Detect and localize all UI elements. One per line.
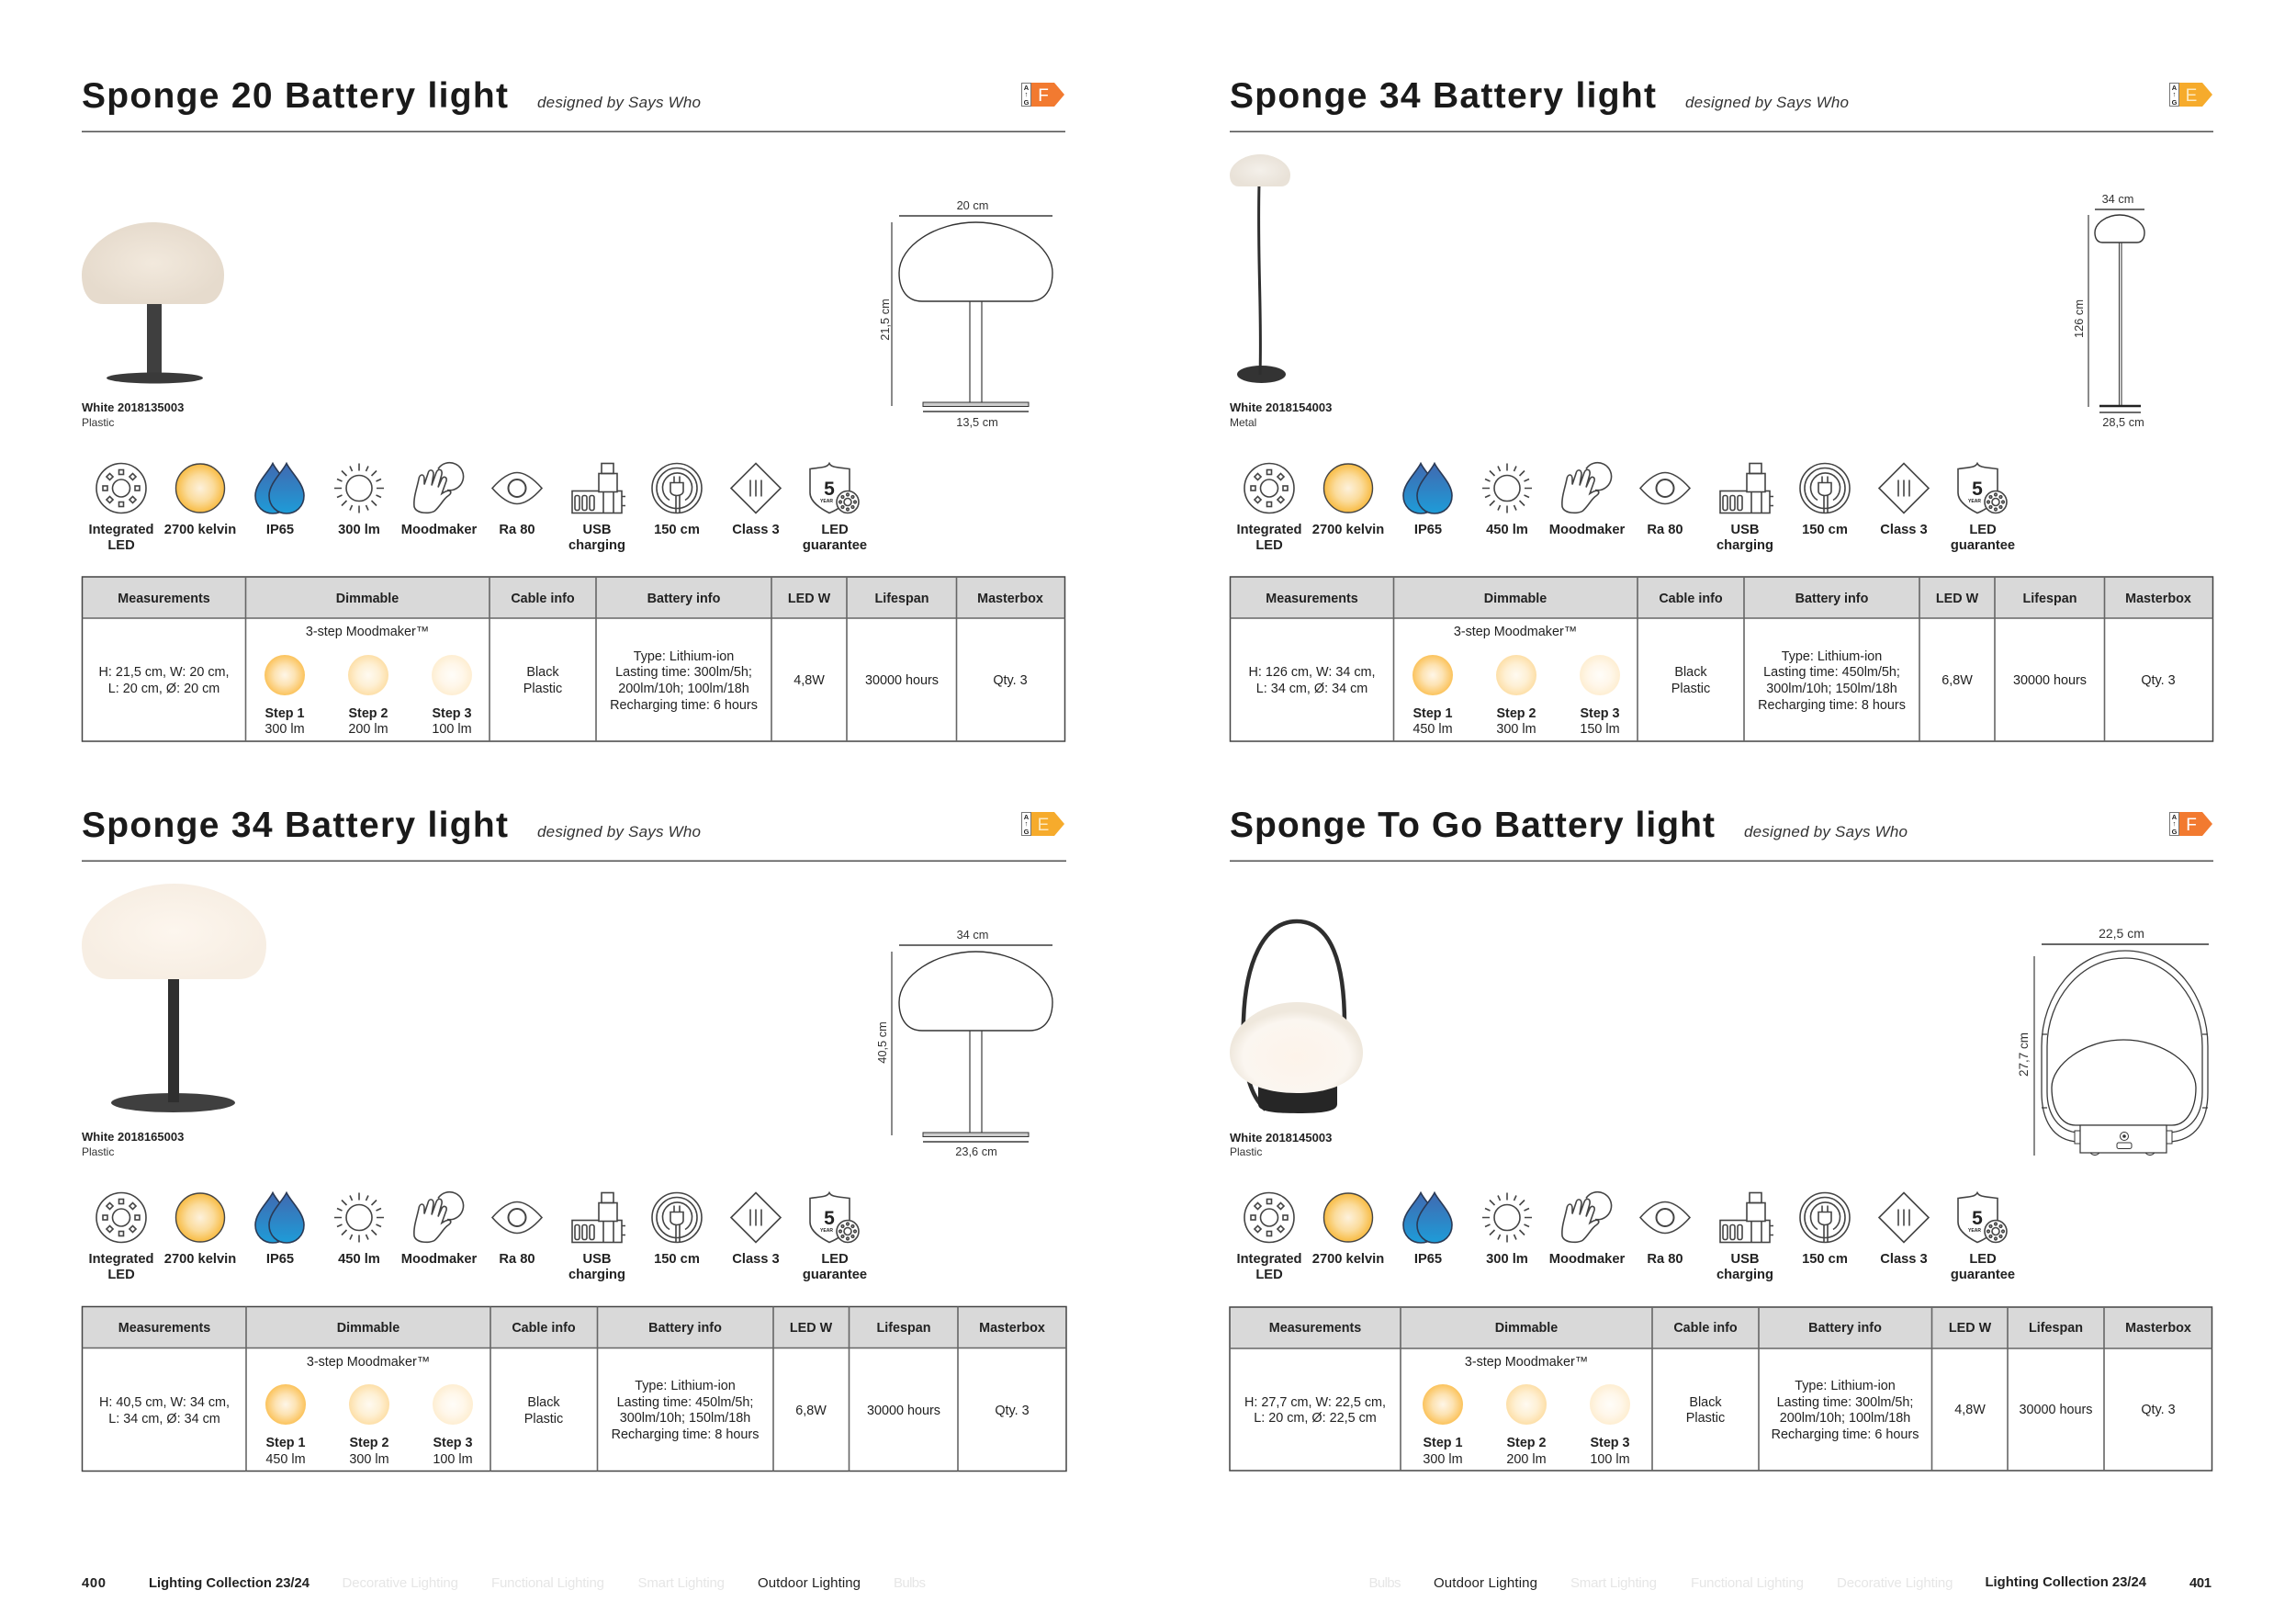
dimension drawing: 22,5 cm bbox=[2099, 926, 2144, 941]
spec table: Battery info bbox=[648, 1321, 722, 1336]
spec table: 30000 hours bbox=[2019, 1403, 2093, 1417]
spec table bbox=[1230, 1307, 2212, 1471]
dimension drawing: 126 cm bbox=[2072, 299, 2086, 338]
feature: USB charging: charging bbox=[1716, 1268, 1773, 1282]
spec table: 200lm/10h; 100lm/18h bbox=[1780, 1411, 1910, 1426]
spec table: Lifespan bbox=[2023, 592, 2077, 606]
spec table: Masterbox bbox=[977, 592, 1043, 606]
spec table: 30000 hours bbox=[865, 673, 939, 688]
spec table: Type: Lithium-ion bbox=[635, 1379, 736, 1393]
energy label bbox=[1021, 812, 1064, 836]
feature: USB charging: charging bbox=[568, 538, 625, 553]
spec table: Qty. 3 bbox=[2141, 673, 2176, 688]
feature: Moodmaker: Moodmaker bbox=[401, 1252, 477, 1267]
feature: USB charging: USB bbox=[582, 1252, 612, 1267]
feature: 150 cm: 150 cm bbox=[1802, 523, 1848, 537]
feature: Ra 80: Ra 80 bbox=[499, 1252, 535, 1267]
dimension drawing: 40,5 cm bbox=[875, 1021, 889, 1064]
feature: IP65: IP65 bbox=[266, 523, 294, 537]
panel: Sponge 34 Battery light table bbox=[82, 806, 1066, 1472]
energy label: G bbox=[1024, 828, 1030, 836]
energy label: A bbox=[2172, 813, 2178, 821]
feature: LED guarantee: 5 bbox=[1972, 479, 1983, 500]
feature: Class 3: Class 3 bbox=[732, 1252, 780, 1267]
product photo bbox=[1230, 154, 1290, 383]
feature: 450 lm: 450 lm bbox=[338, 1252, 380, 1267]
feature: LED guarantee: LED bbox=[1969, 1252, 1997, 1267]
feature: 2700 kelvin: 2700 kelvin bbox=[164, 1252, 236, 1267]
spec table: L: 34 cm, Ø: 34 cm bbox=[1256, 682, 1367, 696]
energy label bbox=[1021, 83, 1064, 107]
feature: LED guarantee bbox=[1951, 1192, 2015, 1282]
feature: 150 cm: 150 cm bbox=[1802, 1252, 1848, 1267]
designer credit: designed by Says Who bbox=[537, 823, 701, 840]
feature: LED guarantee: guarantee bbox=[803, 538, 867, 553]
feature: Integrated LED: Integrated bbox=[1236, 1252, 1302, 1267]
spec table: 100 lm bbox=[1590, 1452, 1630, 1467]
spec table: L: 34 cm, Ø: 34 cm bbox=[108, 1412, 220, 1427]
spec table: Lasting time: 450lm/5h; bbox=[617, 1395, 753, 1410]
footer: left page: Lighting Collection 23/24 bbox=[149, 1576, 310, 1591]
feature: Class 3 bbox=[1879, 463, 1929, 537]
product code: White 2018145003 bbox=[1230, 1131, 1332, 1145]
feature: IP65 bbox=[255, 1192, 304, 1267]
spec table: 100 lm bbox=[433, 1452, 473, 1467]
spec table: Cable info bbox=[1659, 592, 1723, 606]
spec table: H: 27,7 cm, W: 22,5 cm, bbox=[1244, 1395, 1386, 1410]
spec table: Lasting time: 300lm/5h; bbox=[615, 665, 752, 680]
spec table: 200 lm bbox=[1506, 1452, 1547, 1467]
feature: Ra 80 bbox=[1640, 1201, 1690, 1267]
feature: Integrated LED bbox=[1236, 1192, 1302, 1282]
feature: Ra 80 bbox=[492, 472, 542, 537]
spec table: Dimmable bbox=[1495, 1321, 1558, 1336]
spec table bbox=[1231, 577, 2213, 741]
feature: USB charging bbox=[568, 463, 625, 553]
feature: 300 lm: 300 lm bbox=[338, 523, 380, 537]
designer credit: designed by Says Who bbox=[1685, 94, 1849, 111]
spec table: 30000 hours bbox=[2013, 673, 2087, 688]
product photo bbox=[82, 222, 224, 384]
spec table: L: 20 cm, Ø: 20 cm bbox=[108, 682, 219, 696]
feature: 2700 kelvin: 2700 kelvin bbox=[164, 523, 236, 537]
footer: right page: Outdoor Lighting bbox=[1434, 1575, 1537, 1591]
footer: right page: Functional Lighting bbox=[1691, 1575, 1804, 1591]
feature: 150 cm bbox=[1800, 1192, 1850, 1267]
spec table: Lifespan bbox=[877, 1321, 930, 1336]
feature: Integrated LED bbox=[88, 1192, 154, 1282]
feature: LED guarantee: guarantee bbox=[803, 1268, 867, 1282]
designer credit: designed by Says Who bbox=[1744, 823, 1908, 840]
dimension drawing: 21,5 cm bbox=[878, 299, 892, 341]
product code: White 2018135003 bbox=[82, 400, 184, 414]
feature: Moodmaker: Moodmaker bbox=[1549, 1252, 1625, 1267]
energy label: G bbox=[2172, 828, 2178, 836]
energy label: G bbox=[2172, 98, 2178, 107]
spec table: LED W bbox=[790, 1321, 833, 1336]
footer: left page bbox=[82, 1575, 926, 1591]
feature: LED guarantee: YEAR bbox=[820, 1228, 833, 1234]
feature: IP65: IP65 bbox=[1414, 523, 1442, 537]
spec table: Step 1 bbox=[1423, 1436, 1463, 1450]
feature: 450 lm bbox=[1482, 463, 1532, 537]
spec table: Cable info bbox=[511, 592, 575, 606]
feature: 2700 kelvin bbox=[1312, 1193, 1384, 1267]
footer: left page: 400 bbox=[82, 1576, 106, 1591]
dimension drawing: 27,7 cm bbox=[2017, 1032, 2031, 1077]
feature: Moodmaker bbox=[401, 463, 477, 537]
energy label: F bbox=[1038, 86, 1049, 106]
material: Metal bbox=[1230, 416, 1256, 429]
feature: LED guarantee: guarantee bbox=[1951, 538, 2015, 553]
feature: 150 cm bbox=[652, 1192, 702, 1267]
spec table: Black bbox=[1689, 1395, 1722, 1410]
spec table: Step 1 bbox=[264, 706, 305, 721]
spec table: Black bbox=[527, 1395, 560, 1410]
feature: 150 cm bbox=[652, 463, 702, 537]
feature: Integrated LED: LED bbox=[1255, 538, 1283, 553]
product photo bbox=[1230, 921, 1363, 1113]
spec table: Cable info bbox=[512, 1321, 576, 1336]
energy label: A bbox=[1024, 84, 1030, 92]
feature: Integrated LED: Integrated bbox=[88, 1252, 154, 1267]
dimension drawing bbox=[875, 928, 1052, 1158]
spec table: Measurements bbox=[118, 592, 210, 606]
dimension drawing: 34 cm bbox=[957, 928, 988, 942]
spec table: 300 lm bbox=[1496, 722, 1536, 737]
spec table: Step 1 bbox=[265, 1436, 306, 1450]
feature: Class 3 bbox=[731, 463, 781, 537]
feature: USB charging bbox=[568, 1192, 625, 1282]
panel: Sponge 34 Battery light floor bbox=[1230, 76, 2213, 741]
spec table: Step 2 bbox=[1506, 1436, 1547, 1450]
spec table: 300 lm bbox=[349, 1452, 389, 1467]
spec table: Type: Lithium-ion bbox=[634, 649, 734, 664]
feature: Class 3: Class 3 bbox=[1880, 1252, 1928, 1267]
spec table: Step 3 bbox=[433, 1436, 473, 1450]
spec table: Step 1 bbox=[1412, 706, 1453, 721]
panel: Sponge 20 Battery light bbox=[82, 76, 1065, 741]
spec table: Battery info bbox=[647, 592, 721, 606]
energy label: ↑ bbox=[1025, 90, 1028, 98]
feature: USB charging: charging bbox=[568, 1268, 625, 1282]
feature: Integrated LED: Integrated bbox=[1236, 523, 1302, 537]
feature: LED guarantee: guarantee bbox=[1951, 1268, 2015, 1282]
spec table: Masterbox bbox=[2125, 1321, 2191, 1336]
title: Sponge To Go Battery light bbox=[1230, 806, 1715, 845]
spec table: LED W bbox=[1936, 592, 1979, 606]
spec table: 100 lm bbox=[432, 722, 472, 737]
feature: Moodmaker: Moodmaker bbox=[1549, 523, 1625, 537]
product photo bbox=[82, 884, 266, 1112]
energy label: A bbox=[2172, 84, 2178, 92]
product code: White 2018165003 bbox=[82, 1130, 184, 1144]
spec table: Step 3 bbox=[1590, 1436, 1630, 1450]
feature: LED guarantee: LED bbox=[821, 1252, 849, 1267]
feature: Integrated LED: Integrated bbox=[88, 523, 154, 537]
spec table: Qty. 3 bbox=[2141, 1403, 2176, 1417]
feature: Integrated LED: LED bbox=[107, 538, 135, 553]
spec table: H: 21,5 cm, W: 20 cm, bbox=[98, 665, 230, 680]
feature: Integrated LED: LED bbox=[1255, 1268, 1283, 1282]
energy label: F bbox=[2186, 816, 2197, 835]
feature: Ra 80: Ra 80 bbox=[1647, 1252, 1683, 1267]
spec table: 6,8W bbox=[795, 1404, 827, 1418]
feature: LED guarantee: YEAR bbox=[1968, 1228, 1981, 1234]
feature: Class 3 bbox=[1879, 1192, 1929, 1267]
spec table: Battery info bbox=[1808, 1321, 1882, 1336]
spec table: 6,8W bbox=[1941, 673, 1973, 688]
feature: IP65 bbox=[255, 463, 304, 537]
spec table: 200lm/10h; 100lm/18h bbox=[618, 682, 749, 696]
spec table: Qty. 3 bbox=[995, 1404, 1030, 1418]
footer: right page: Lighting Collection 23/24 bbox=[1986, 1575, 2147, 1590]
spec table: L: 20 cm, Ø: 22,5 cm bbox=[1254, 1411, 1377, 1426]
spec table: 200 lm bbox=[348, 722, 388, 737]
spec table: Recharging time: 6 hours bbox=[610, 698, 758, 713]
feature: Ra 80 bbox=[1640, 472, 1690, 537]
spec table: Dimmable bbox=[337, 1321, 400, 1336]
spec table: 450 lm bbox=[265, 1452, 306, 1467]
dimension drawing: 13,5 cm bbox=[956, 415, 998, 429]
feature: USB charging: USB bbox=[1730, 523, 1760, 537]
spec table: Masterbox bbox=[979, 1321, 1045, 1336]
spec table: Dimmable bbox=[1484, 592, 1547, 606]
feature: LED guarantee bbox=[803, 1192, 867, 1282]
feature: Class 3: Class 3 bbox=[732, 523, 780, 537]
dimension drawing bbox=[2017, 926, 2209, 1156]
spec table: 3-step Moodmaker™ bbox=[1465, 1355, 1588, 1370]
material: Plastic bbox=[1230, 1145, 1262, 1158]
feature: LED guarantee: 5 bbox=[824, 479, 835, 500]
title: Sponge 34 Battery light bbox=[82, 806, 508, 845]
feature: LED guarantee: 5 bbox=[824, 1208, 835, 1229]
feature: Moodmaker bbox=[1549, 1192, 1625, 1267]
feature: Moodmaker bbox=[401, 1192, 477, 1267]
spec table: Cable info bbox=[1673, 1321, 1738, 1336]
energy label: E bbox=[1038, 816, 1049, 835]
dimension drawing: 20 cm bbox=[957, 198, 988, 212]
spec table: 4,8W bbox=[1954, 1403, 1986, 1417]
feature: Ra 80 bbox=[492, 1201, 542, 1267]
footer: right page bbox=[1368, 1575, 2212, 1591]
spec table: 3-step Moodmaker™ bbox=[1454, 625, 1577, 639]
spec table: Black bbox=[526, 665, 559, 680]
spec table: Qty. 3 bbox=[993, 673, 1028, 688]
spec table: Step 3 bbox=[432, 706, 472, 721]
feature: 150 cm: 150 cm bbox=[654, 1252, 700, 1267]
feature: 2700 kelvin bbox=[164, 1193, 236, 1267]
feature: 300 lm bbox=[1482, 1192, 1532, 1267]
spec table: LED W bbox=[788, 592, 831, 606]
energy label: A bbox=[1024, 813, 1030, 821]
energy label: ↑ bbox=[1025, 819, 1028, 828]
spec table: Plastic bbox=[523, 682, 562, 696]
spec table: 150 lm bbox=[1580, 722, 1620, 737]
footer: left page: Functional Lighting bbox=[491, 1575, 604, 1591]
spec table: Step 2 bbox=[348, 706, 388, 721]
spec table: Plastic bbox=[524, 1412, 563, 1427]
feature: LED guarantee: YEAR bbox=[820, 499, 833, 504]
feature: LED guarantee: 5 bbox=[1972, 1208, 1983, 1229]
feature: IP65: IP65 bbox=[1414, 1252, 1442, 1267]
spec table: 30000 hours bbox=[867, 1404, 940, 1418]
feature: 2700 kelvin bbox=[1312, 464, 1384, 537]
spec table: Plastic bbox=[1671, 682, 1710, 696]
designer credit: designed by Says Who bbox=[537, 94, 701, 111]
spec table: Lifespan bbox=[875, 592, 929, 606]
spec table: Battery info bbox=[1795, 592, 1869, 606]
spec table: Measurements bbox=[118, 1321, 210, 1336]
spec table: Measurements bbox=[1266, 592, 1358, 606]
spec table: Recharging time: 8 hours bbox=[612, 1427, 759, 1442]
feature: 150 cm: 150 cm bbox=[654, 523, 700, 537]
spec table: 300 lm bbox=[264, 722, 305, 737]
spec table: 4,8W bbox=[793, 673, 825, 688]
spec table: Recharging time: 8 hours bbox=[1758, 698, 1906, 713]
feature: 300 lm: 300 lm bbox=[1486, 1252, 1528, 1267]
spec table: Masterbox bbox=[2125, 592, 2191, 606]
spec table: 450 lm bbox=[1412, 722, 1453, 737]
spec table: Lasting time: 300lm/5h; bbox=[1777, 1395, 1913, 1410]
feature: LED guarantee bbox=[803, 463, 867, 553]
spec table: H: 126 cm, W: 34 cm, bbox=[1248, 665, 1376, 680]
spec table: 300 lm bbox=[1423, 1452, 1463, 1467]
energy label bbox=[2169, 83, 2212, 107]
material: Plastic bbox=[82, 416, 114, 429]
feature: 2700 kelvin bbox=[164, 464, 236, 537]
dimension drawing: 34 cm bbox=[2102, 192, 2133, 206]
feature: Moodmaker: Moodmaker bbox=[401, 523, 477, 537]
product code: White 2018154003 bbox=[1230, 400, 1332, 414]
spec table: 3-step Moodmaker™ bbox=[307, 1355, 430, 1370]
spec table: 3-step Moodmaker™ bbox=[306, 625, 429, 639]
feature: Integrated LED bbox=[88, 463, 154, 553]
feature: 2700 kelvin: 2700 kelvin bbox=[1312, 523, 1384, 537]
spec table: Measurements bbox=[1269, 1321, 1361, 1336]
footer: left page: Bulbs bbox=[894, 1575, 926, 1591]
spec table: Black bbox=[1674, 665, 1707, 680]
footer: right page: Decorative Lighting bbox=[1837, 1575, 1953, 1591]
feature: 450 lm: 450 lm bbox=[1486, 523, 1528, 537]
feature: 150 cm bbox=[1800, 463, 1850, 537]
title: Sponge 20 Battery light bbox=[82, 76, 508, 116]
footer: right page: 401 bbox=[2189, 1576, 2212, 1591]
spec table: LED W bbox=[1949, 1321, 1992, 1336]
feature: 2700 kelvin: 2700 kelvin bbox=[1312, 1252, 1384, 1267]
spec table: Recharging time: 6 hours bbox=[1772, 1427, 1919, 1442]
feature: LED guarantee bbox=[1951, 463, 2015, 553]
feature: Moodmaker bbox=[1549, 463, 1625, 537]
feature: IP65: IP65 bbox=[266, 1252, 294, 1267]
feature: USB charging bbox=[1716, 463, 1773, 553]
feature: Class 3 bbox=[731, 1192, 781, 1267]
footer: left page: Decorative Lighting bbox=[342, 1575, 458, 1591]
feature: 300 lm bbox=[334, 463, 384, 537]
spec table: Plastic bbox=[1686, 1411, 1725, 1426]
energy label: ↑ bbox=[2173, 90, 2176, 98]
spec table: Type: Lithium-ion bbox=[1782, 649, 1882, 664]
feature: IP65 bbox=[1403, 1192, 1452, 1267]
spec table: Dimmable bbox=[336, 592, 399, 606]
feature: Ra 80: Ra 80 bbox=[1647, 523, 1683, 537]
energy label: E bbox=[2186, 86, 2197, 106]
spec table: 300lm/10h; 150lm/18h bbox=[620, 1411, 750, 1426]
spec table: Lasting time: 450lm/5h; bbox=[1763, 665, 1900, 680]
dimension drawing bbox=[878, 198, 1052, 429]
spec table: Step 2 bbox=[1496, 706, 1536, 721]
feature: Integrated LED bbox=[1236, 463, 1302, 553]
feature: LED guarantee: LED bbox=[821, 523, 849, 537]
footer: right page: Bulbs bbox=[1368, 1575, 1401, 1591]
feature: USB charging bbox=[1716, 1192, 1773, 1282]
spec table: H: 40,5 cm, W: 34 cm, bbox=[99, 1395, 230, 1410]
feature: USB charging: USB bbox=[582, 523, 612, 537]
feature: Class 3: Class 3 bbox=[1880, 523, 1928, 537]
feature: 450 lm bbox=[334, 1192, 384, 1267]
spec table: 300lm/10h; 150lm/18h bbox=[1766, 682, 1897, 696]
feature: USB charging: charging bbox=[1716, 538, 1773, 553]
spec table bbox=[83, 1306, 1066, 1472]
feature: LED guarantee: YEAR bbox=[1968, 499, 1981, 504]
dimension drawing bbox=[2072, 192, 2144, 429]
footer: right page: Smart Lighting bbox=[1570, 1575, 1657, 1591]
material: Plastic bbox=[82, 1145, 114, 1158]
feature: Ra 80: Ra 80 bbox=[499, 523, 535, 537]
energy label bbox=[2169, 812, 2212, 836]
panel: Sponge To Go Battery light bbox=[1230, 806, 2213, 1471]
dimension drawing: 23,6 cm bbox=[955, 1145, 997, 1158]
spec table: Step 2 bbox=[349, 1436, 389, 1450]
spec table: Lifespan bbox=[2029, 1321, 2083, 1336]
dimension drawing: 28,5 cm bbox=[2102, 415, 2144, 429]
spec table bbox=[83, 577, 1065, 741]
feature: LED guarantee: LED bbox=[1969, 523, 1997, 537]
footer: left page: Outdoor Lighting bbox=[758, 1575, 861, 1591]
feature: Integrated LED: LED bbox=[107, 1268, 135, 1282]
title: Sponge 34 Battery light bbox=[1230, 76, 1656, 116]
energy label: ↑ bbox=[2173, 819, 2176, 828]
energy label: G bbox=[1024, 98, 1030, 107]
spec table: Step 3 bbox=[1580, 706, 1620, 721]
footer: left page: Smart Lighting bbox=[637, 1575, 725, 1591]
feature: USB charging: USB bbox=[1730, 1252, 1760, 1267]
spec table: Type: Lithium-ion bbox=[1795, 1379, 1896, 1393]
feature: IP65 bbox=[1403, 463, 1452, 537]
